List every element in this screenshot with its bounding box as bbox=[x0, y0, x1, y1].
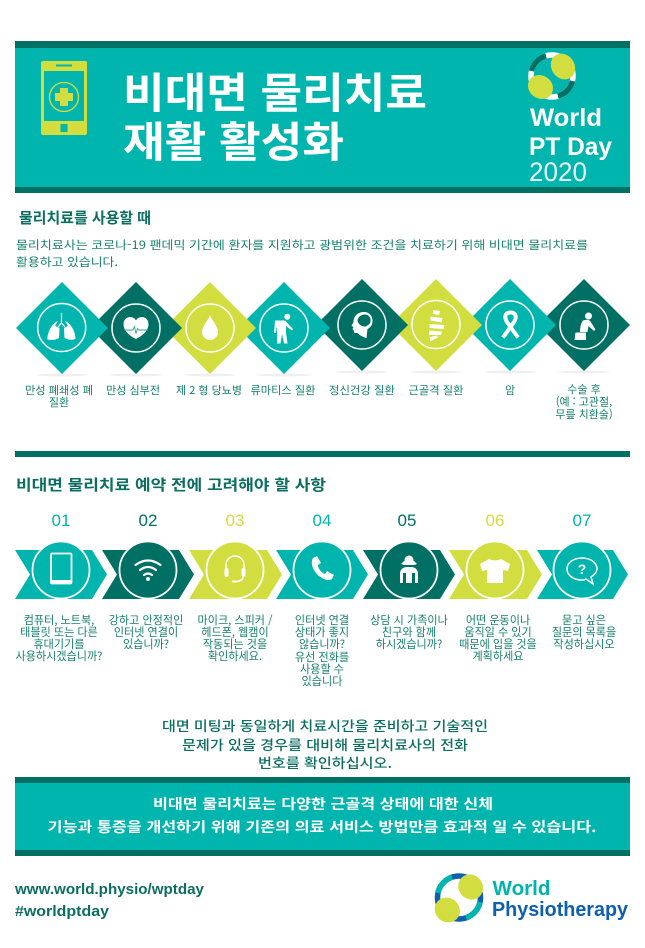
step 1 tablet bbox=[15, 542, 107, 599]
logo: World Physiotherapy: Physiotherapy bbox=[492, 899, 629, 921]
intro paragraph: 활용하고 있습니다. bbox=[16, 254, 118, 270]
step 7 text: 작성하십시오 bbox=[553, 636, 615, 652]
condition labels: 무릎 치환술) bbox=[555, 406, 613, 422]
panel: key message: 기능과 통증을 개선하기 위해 기존의 의료 서비스 방법만큼 효과적 일 수 있습니다. bbox=[48, 817, 596, 837]
step 7 question bubble bbox=[537, 542, 628, 599]
step numbers: 06 bbox=[486, 511, 504, 530]
reminder paragraph: 번호를 확인하십시오. bbox=[258, 752, 392, 772]
section heading: when to use: 물리치료를 사용할 때 bbox=[19, 207, 151, 228]
step 3 text: 작동되는 것을 bbox=[203, 636, 267, 652]
header panel bbox=[15, 41, 630, 193]
title bbox=[123, 60, 427, 170]
step numbers: 02 bbox=[139, 511, 157, 530]
reminder paragraph: 문제가 있을 경우를 대비해 물리치료사의 전화 bbox=[182, 734, 469, 754]
condition labels: 수술 후 bbox=[567, 381, 601, 397]
step 5 text: 친구와 함께 bbox=[382, 624, 436, 640]
intro paragraph: 물리치료사는 코로나-19 팬데믹 기간에 환자를 지원하고 광범위한 조건을 치료하기 위해 비대면 물리치료를 bbox=[16, 237, 588, 253]
step 7 question bubble: ? bbox=[578, 561, 586, 577]
step 2 wifi bbox=[102, 542, 194, 599]
condition labels: 만성 폐쇄성 폐 bbox=[25, 382, 93, 398]
footer links bbox=[14, 881, 205, 920]
step 3 text: 확인하세요. bbox=[208, 648, 262, 664]
panel: key message: 비대면 물리치료는 다양한 근골격 상태에 대한 신체 bbox=[153, 794, 493, 814]
diamond: rheumatic walking figure bbox=[238, 282, 330, 374]
step 7 text: 묻고 싶은 bbox=[562, 612, 606, 628]
step 4 phone bbox=[276, 542, 368, 599]
condition labels: (예 : 고관절, bbox=[556, 394, 612, 410]
step 3 text: 마이크, 스피커 / bbox=[198, 612, 273, 628]
diamond: COPD lungs bbox=[16, 282, 108, 374]
step 1 text: 태블릿 또는 다른 bbox=[20, 624, 98, 640]
logo: World Physiotherapy: World bbox=[492, 878, 550, 900]
condition labels: 류마티스 질환 bbox=[250, 382, 316, 398]
step numbers: 05 bbox=[398, 511, 416, 530]
logo: World PT Day 2020: 2020 bbox=[529, 157, 587, 187]
step 2 text: 인터넷 연결이 bbox=[114, 624, 178, 640]
condition labels: 질환 bbox=[49, 394, 69, 410]
diamond: musculoskeletal spine bbox=[390, 279, 482, 371]
condition labels: 정신건강 질환 bbox=[329, 382, 395, 398]
icon: phone with medical cross bbox=[41, 61, 87, 135]
footer links: www.world.physio/wptday bbox=[14, 881, 205, 898]
step 4 text: 인터넷 연결 bbox=[295, 612, 349, 628]
footer links: #worldptday bbox=[15, 903, 110, 920]
panel: key message bbox=[15, 777, 630, 856]
panel: step chevrons bbox=[15, 542, 628, 599]
step 6 text: 어떤 운동이나 bbox=[466, 612, 530, 628]
logo: World Physiotherapy bbox=[430, 869, 629, 928]
step 3 headset bbox=[189, 542, 282, 599]
diamond: mental health head bbox=[316, 279, 408, 371]
step 5 family person bbox=[363, 542, 455, 599]
step 2 text bbox=[109, 612, 183, 652]
step 5 text: 하시겠습니까? bbox=[376, 636, 442, 652]
step 6 text bbox=[459, 612, 537, 664]
step 4 text bbox=[295, 612, 349, 689]
step 1 text bbox=[16, 612, 102, 664]
step 2 text: 강하고 안정적인 bbox=[109, 612, 183, 628]
condition labels: 암 bbox=[505, 382, 515, 398]
diamond: diabetes drop bbox=[164, 282, 256, 374]
reminder paragraph bbox=[162, 715, 488, 772]
condition labels: 근골격 질환 bbox=[408, 382, 464, 398]
step descriptions bbox=[16, 612, 616, 689]
diamond: post surgery bbox=[538, 279, 630, 371]
step 6 text: 움직일 수 있기 bbox=[464, 624, 532, 640]
step numbers: 03 bbox=[226, 511, 244, 530]
step 7 text bbox=[552, 612, 616, 652]
reminder paragraph: 대면 미팅과 동일하게 치료시간을 준비하고 기술적인 bbox=[162, 715, 488, 735]
step 7 text: 질문의 목록을 bbox=[552, 624, 616, 640]
diamond shadows bbox=[36, 371, 610, 376]
step 4 text: 사용할 수 bbox=[300, 661, 344, 677]
logo: World PT Day 2020: PT Day bbox=[529, 133, 612, 161]
divider bbox=[15, 451, 630, 457]
intro paragraph bbox=[16, 237, 588, 270]
diamond: cancer ribbon bbox=[464, 279, 556, 371]
step numbers: 01 bbox=[52, 511, 70, 530]
step 6 t-shirt bbox=[449, 542, 542, 599]
step numbers bbox=[52, 511, 591, 530]
section heading: before booking: 비대면 물리치료 예약 전에 고려해야 할 사항 bbox=[16, 474, 326, 495]
diamond: heart failure heart bbox=[90, 282, 182, 374]
title: 재활 활성화 bbox=[123, 109, 344, 170]
step 1 text: 휴대기기를 bbox=[33, 636, 85, 652]
step 3 text: 헤드폰, 웹캠이 bbox=[201, 624, 269, 640]
condition labels: 만성 심부전 bbox=[106, 382, 160, 398]
step numbers: 04 bbox=[313, 511, 331, 530]
step 2 text: 있습니까? bbox=[123, 636, 169, 652]
panel: conditions diamonds bbox=[16, 279, 630, 376]
condition labels bbox=[25, 381, 613, 422]
logo: World PT Day 2020 bbox=[523, 49, 612, 187]
step 4 text: 상태가 좋지 bbox=[295, 624, 349, 640]
step 4 text: 있습니다 bbox=[302, 673, 342, 689]
step numbers: 07 bbox=[573, 511, 591, 530]
condition labels: 제 2 형 당뇨병 bbox=[176, 382, 242, 398]
step 3 text bbox=[198, 612, 273, 664]
step 6 text: 계획하세요 bbox=[472, 648, 524, 664]
step 1 text: 사용하시겠습니까? bbox=[16, 648, 102, 664]
title: 비대면 물리치료 bbox=[123, 60, 427, 121]
step 4 text: 유선 전화를 bbox=[295, 649, 349, 665]
logo: World PT Day 2020: World bbox=[530, 104, 602, 132]
step 5 text: 상담 시 가족이나 bbox=[370, 612, 448, 628]
step 4 text: 않습니까? bbox=[299, 636, 345, 652]
step 6 text: 때문에 입을 것을 bbox=[459, 636, 537, 652]
step 1 text: 컴퓨터, 노트북, bbox=[24, 612, 94, 628]
step 5 text bbox=[370, 612, 448, 652]
